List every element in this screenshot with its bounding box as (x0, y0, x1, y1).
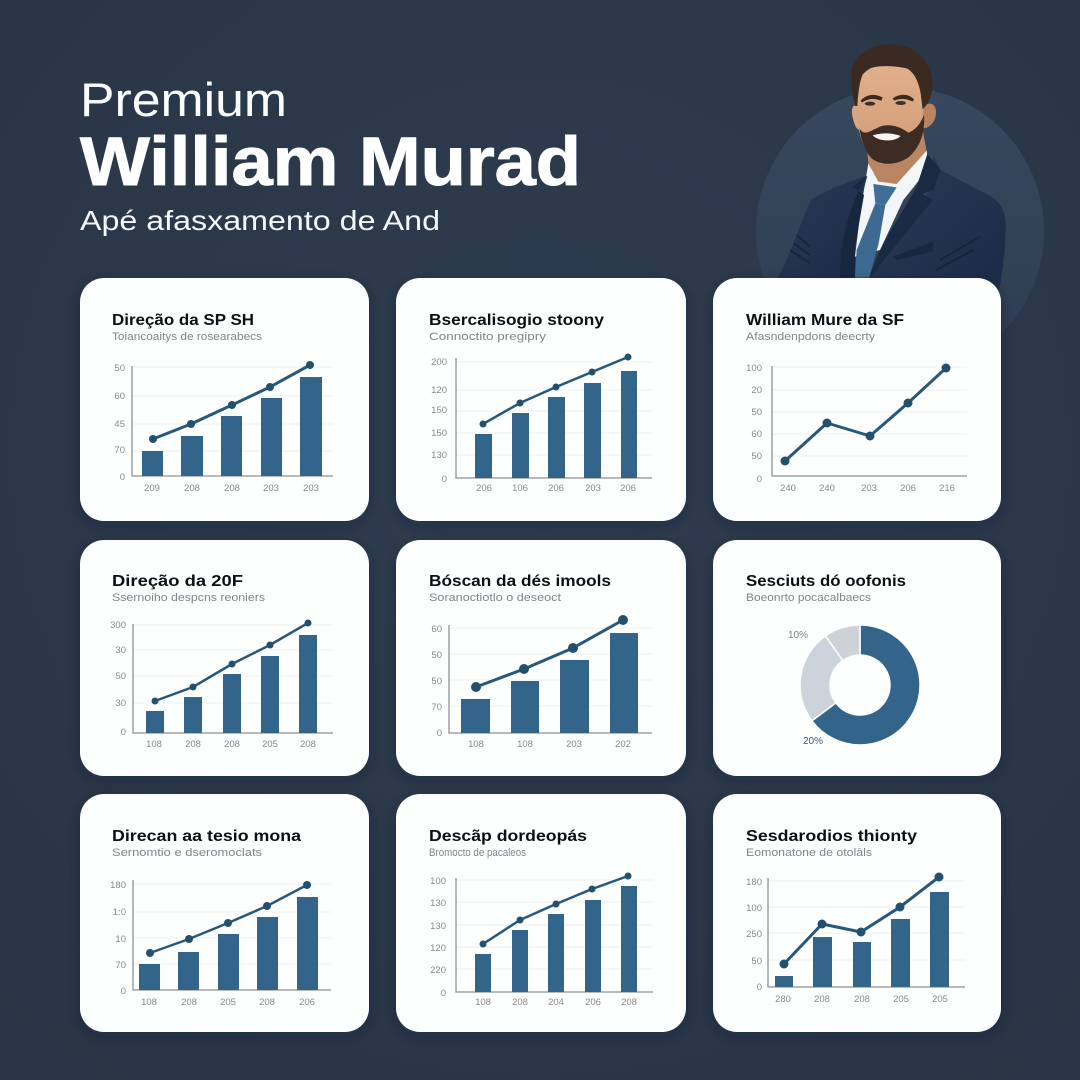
panel: card 2 combo chart (396, 278, 686, 521)
card 4 subheading: Ssernoiho despcns reoniers (112, 592, 266, 604)
card 7 chart: 208 (181, 997, 197, 1008)
card 8 subheading: Bromocto de pacaleos (429, 847, 526, 859)
card 8 chart: 120 (430, 943, 446, 954)
card 3 chart: 50 (751, 407, 762, 418)
card 4 chart: 208 (185, 739, 201, 750)
card 5 subheading: Soranoctiotlo o deseoct (429, 592, 561, 604)
card 2 chart: 206 (548, 483, 564, 494)
portrait: man in suit (777, 44, 1006, 293)
card 1 chart: 45 (114, 419, 125, 430)
portrait backdrop circle (756, 87, 1044, 375)
card 4 chart: 0 (121, 727, 126, 738)
card 9 chart: 280 (775, 994, 791, 1005)
card 8 chart: 130 (430, 921, 446, 932)
card 3 subheading: Afasndenpdons deecrty (746, 331, 876, 343)
panel: card 4 combo chart (80, 540, 369, 776)
panel: card 1 combo chart (80, 278, 369, 521)
subtitle: Apé afasxamento de And (80, 205, 440, 236)
card 9 subheading: Eomonatone de otolāls (746, 847, 873, 859)
card 3 chart: 240 (780, 483, 796, 494)
card 4 chart: 205 (262, 739, 278, 750)
card 3 chart: 0 (757, 474, 762, 485)
card 5 chart: 108 (468, 739, 484, 750)
card 2 chart: 206 (476, 483, 492, 494)
card 9 chart: 100 (746, 903, 762, 914)
card 2 chart: 150 (431, 405, 447, 416)
card 1 chart: 208 (224, 483, 240, 494)
card 5 chart: 203 (566, 739, 582, 750)
card 2 chart: 150 (431, 428, 447, 439)
card 1 chart: 203 (263, 483, 279, 494)
card 4 heading: Direção da 20F (112, 573, 243, 590)
card 6 subheading: Boeonrto pocacalbaecs (746, 592, 872, 604)
card 2 heading: Bsercalisogio stoony (429, 312, 604, 329)
card 1 heading: Direção da SP SH (112, 312, 254, 329)
panel: card 9 combo chart (713, 794, 1001, 1032)
card 3 chart: 203 (861, 483, 877, 494)
card 5 chart: 0 (437, 728, 442, 739)
card 7 chart: 1:0 (113, 907, 126, 918)
card 9 chart: 208 (854, 994, 870, 1005)
card 5 heading: Bóscan da dés imools (429, 573, 611, 590)
card 6 donut (800, 625, 920, 745)
panel: card 6 donut chart (713, 540, 1001, 776)
card 4 chart (110, 620, 333, 750)
card 9 heading: Sesdarodios thionty (746, 828, 917, 845)
card 5 chart: 60 (431, 624, 442, 635)
card 1 chart: 60 (114, 391, 125, 402)
card 3 chart (746, 363, 967, 494)
card 5 chart: 50 (431, 676, 442, 687)
card 7 chart: 10 (115, 934, 126, 945)
card 9 chart: 205 (932, 994, 948, 1005)
card 5 chart: 202 (615, 739, 631, 750)
card 1 chart: 203 (303, 483, 319, 494)
card 3 chart: 240 (819, 483, 835, 494)
card 4 chart: 208 (224, 739, 240, 750)
card 8 chart: 0 (441, 988, 446, 999)
card 8 chart: 206 (585, 997, 601, 1008)
card 3 chart: 60 (751, 429, 762, 440)
card 3 chart: 216 (939, 483, 955, 494)
card 7 chart (110, 880, 331, 1008)
donut label bottom: 20% (803, 736, 823, 747)
card 2 chart: 203 (585, 483, 601, 494)
card 8 chart: 208 (512, 997, 528, 1008)
card 7 chart: 205 (220, 997, 236, 1008)
card 3 heading: William Mure da SF (746, 312, 904, 329)
card 8 heading: Descãp dordeopás (429, 828, 587, 845)
card 1 chart: 208 (184, 483, 200, 494)
panel: card 3 line chart (713, 278, 1001, 521)
card 8 chart (430, 872, 653, 1008)
card 8 chart: 220 (430, 965, 446, 976)
card 5 chart: 50 (431, 650, 442, 661)
card 2 chart: 0 (442, 474, 447, 485)
card 4 chart: 30 (115, 645, 126, 656)
card 1 chart (114, 361, 333, 494)
card 2 chart: 206 (620, 483, 636, 494)
card 6 heading: Sesciuts dó oofonis (746, 573, 906, 590)
card 8 chart: 204 (548, 997, 564, 1008)
card 4 chart: 300 (110, 620, 126, 631)
card 5 chart: 70 (431, 702, 442, 713)
card 7 chart: 70 (115, 960, 126, 971)
card 7 subheading: Sernomtio e dseromoclats (112, 847, 263, 859)
card 7 chart: 206 (299, 997, 315, 1008)
card 3 chart: 20 (751, 385, 762, 396)
card 1 chart: 70 (114, 445, 125, 456)
card 2 chart (431, 354, 652, 494)
card 9 chart: 205 (893, 994, 909, 1005)
panel: card 8 combo chart (396, 794, 686, 1032)
card 1 chart: 209 (144, 483, 160, 494)
card 2 chart: 200 (431, 357, 447, 368)
card 5 chart (431, 615, 652, 750)
panel: card 5 combo chart (396, 540, 686, 776)
card 9 chart: 0 (757, 982, 762, 993)
card 7 chart: 208 (259, 997, 275, 1008)
card 3 chart: 206 (900, 483, 916, 494)
card 9 chart (746, 872, 965, 1005)
card 9 chart: 180 (746, 877, 762, 888)
card 3 chart: 100 (746, 363, 762, 374)
card 3 chart: 50 (751, 451, 762, 462)
card 1 chart: 50 (114, 363, 125, 374)
card 4 chart: 50 (115, 671, 126, 682)
card 8 chart: 208 (621, 997, 637, 1008)
card 4 chart: 108 (146, 739, 162, 750)
card 8 chart: 100 (430, 876, 446, 887)
title: William Murad: William Murad (80, 123, 581, 200)
card 8 chart: 108 (475, 997, 491, 1008)
card 7 chart: 0 (121, 986, 126, 997)
card 1 chart: 0 (120, 472, 125, 483)
card 9 chart: 50 (751, 956, 762, 967)
card 2 chart: 106 (512, 483, 528, 494)
card 8 chart: 130 (430, 898, 446, 909)
card 1 subheading: Toiancoaitys de rosearabecs (112, 331, 263, 343)
donut label top: 10% (788, 630, 808, 641)
card 5 chart: 108 (517, 739, 533, 750)
panel: card 7 combo chart (80, 794, 369, 1032)
card 7 heading: Direcan aa tesio mona (112, 828, 301, 845)
card 9 chart: 250 (746, 929, 762, 940)
card 2 subheading: Connoctito pregipry (429, 331, 547, 343)
card 4 chart: 30 (115, 698, 126, 709)
card 7 chart: 108 (141, 997, 157, 1008)
card 2 chart: 130 (431, 450, 447, 461)
card 9 chart: 208 (814, 994, 830, 1005)
card 7 chart: 180 (110, 880, 126, 891)
title: Premium: Premium (80, 73, 287, 126)
card 4 chart: 208 (300, 739, 316, 750)
card 2 chart: 120 (431, 385, 447, 396)
